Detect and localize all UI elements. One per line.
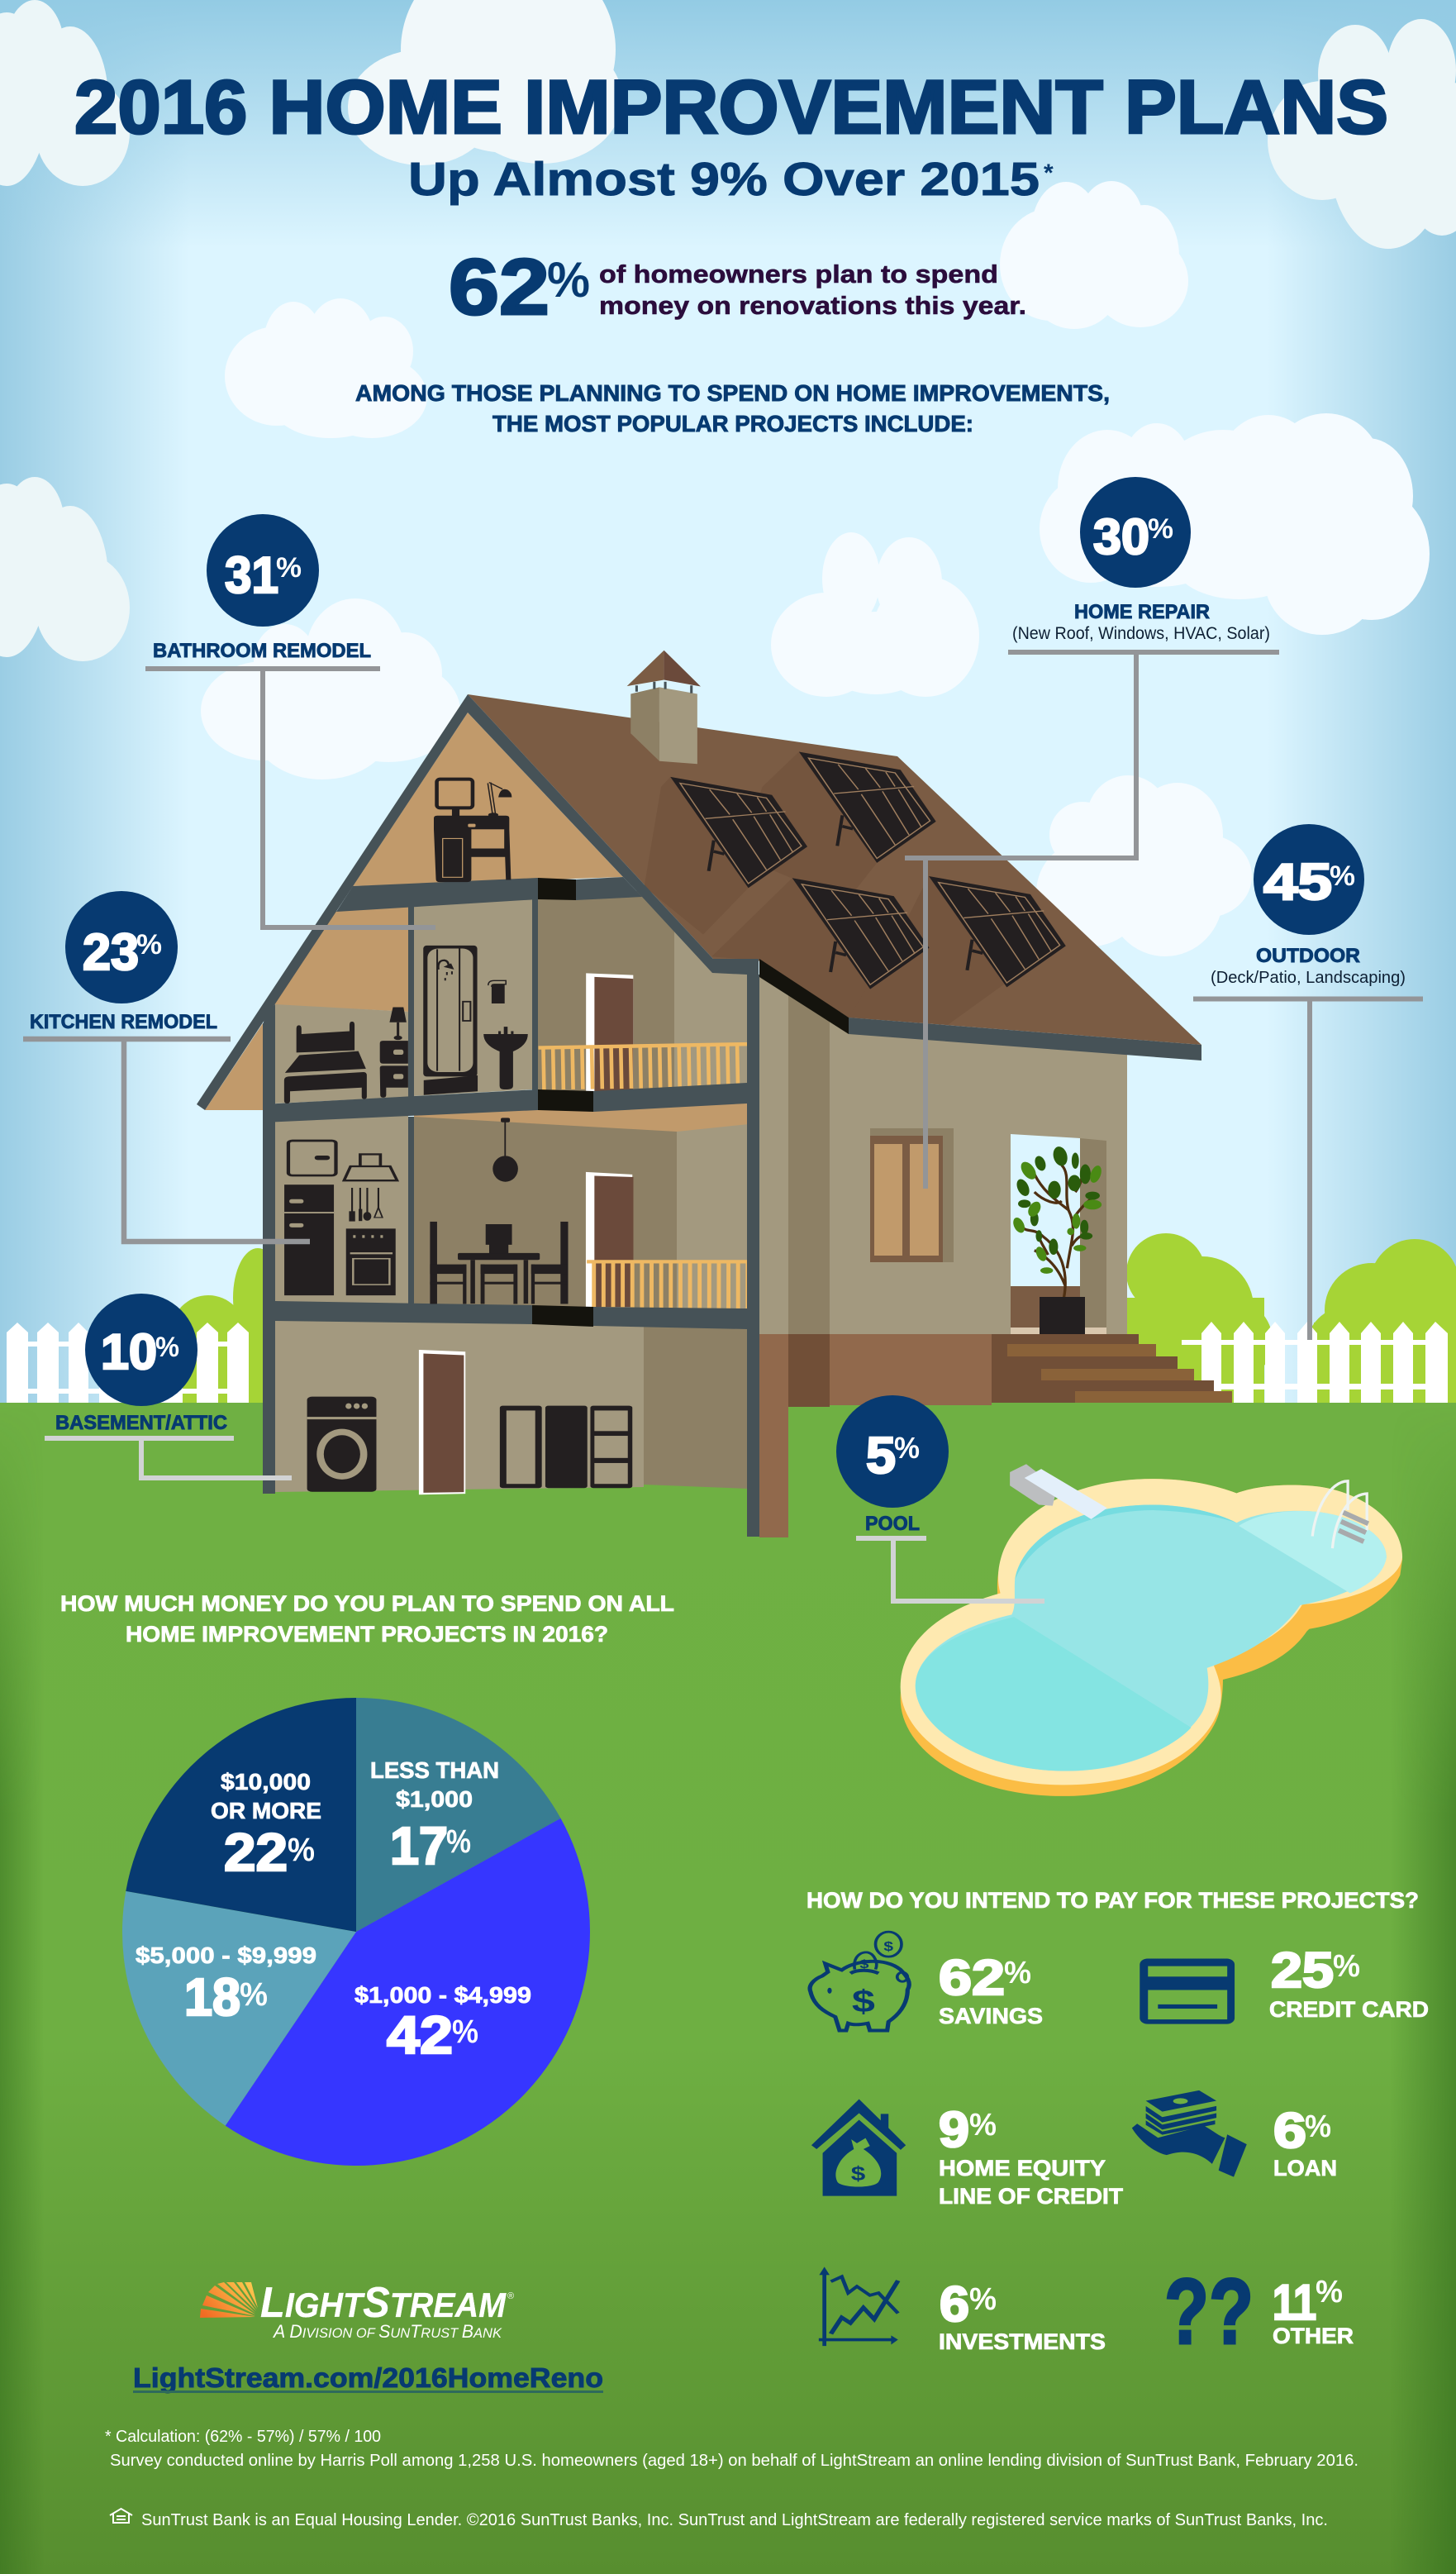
stat: other <box>1164 2260 1354 2363</box>
callout: outdoor 45 percent <box>1193 824 1423 1340</box>
callout: home repair 30 percent: HOME REPAIR <box>1074 601 1210 623</box>
upper door <box>586 973 633 1091</box>
slice: 10000 or more <box>126 1698 356 1932</box>
callout: bathroom remodel 31 percent: 31 <box>225 547 278 604</box>
upper balcony railing <box>539 1042 750 1068</box>
heading: spending question: HOW MUCH MONEY DO YOU PLAN TO SPEND ON ALL <box>60 1591 674 1616</box>
icon: piggy bank <box>810 1932 909 2031</box>
dining room walls <box>414 1095 749 1311</box>
slice: less than 1000: 17 <box>390 1816 448 1876</box>
structural frame <box>197 694 759 1537</box>
icon: dining table and chairs <box>430 1222 569 1304</box>
callout: pool 5 percent <box>836 1395 1044 1601</box>
logo: LightStream: A DIVISION OF SUNTRUST BANK <box>272 2321 502 2342</box>
roof <box>468 694 1201 1045</box>
stat: 62 percent of homeowners: % <box>547 252 590 307</box>
icon: shower <box>423 946 478 1095</box>
icon: bed and nightstand <box>284 1007 408 1103</box>
slice: 10000 or more: OR MORE <box>211 1798 321 1823</box>
right wing exterior wall <box>759 967 1127 1537</box>
balcony room walls <box>538 891 749 1091</box>
callout: basement attic 10 percent: % <box>155 1332 179 1363</box>
leader line <box>856 1538 1044 1601</box>
lower balcony railing <box>587 1260 749 1285</box>
stat: 62 percent of homeowners: 62 <box>449 243 550 331</box>
icon: hand holding money <box>1132 2090 1247 2177</box>
leader line <box>23 1039 310 1242</box>
badge <box>1254 824 1364 935</box>
section intro <box>355 380 1110 436</box>
badge <box>1080 477 1191 588</box>
callout: kitchen remodel 23 percent: % <box>136 929 162 960</box>
slice: 5000 to 9999: % <box>240 1976 268 2013</box>
stat: other: OTHER <box>1273 2324 1354 2348</box>
slice: less than 1000: LESS THAN <box>370 1757 499 1783</box>
subtitle: * <box>1044 160 1054 187</box>
icon: house with money bag: $ <box>851 2162 866 2185</box>
stat: credit card <box>1140 1942 1429 2024</box>
icon: sunburst <box>200 2282 258 2318</box>
slice: 1000 to 4999 <box>226 1818 590 2166</box>
basement door <box>419 1350 465 1494</box>
kitchen walls <box>275 1112 408 1306</box>
pie chart <box>122 1698 590 2166</box>
section intro: THE MOST POPULAR PROJECTS INCLUDE: <box>492 411 973 436</box>
slice: less than 1000: % <box>446 1823 471 1860</box>
front steps <box>992 1334 1232 1403</box>
icon: pendant lamp <box>492 1118 518 1182</box>
callout: home repair 30 percent: 30 <box>1093 509 1149 565</box>
callout: home repair 30 percent: % <box>1148 513 1173 545</box>
basement walls <box>275 1318 749 1492</box>
slice: 1000 to 4999: % <box>452 2014 478 2050</box>
footnotes: SunTrust Bank is an Equal Housing Lender. ©2016 SunTrust Banks, Inc. SunTrust and LightStream are federally registered service marks of SunTrust Banks, Inc. <box>141 2511 1328 2529</box>
slice: 5000 to 9999: 18 <box>184 1967 240 2027</box>
badge <box>65 891 178 1003</box>
slice: 1000 to 4999: 42 <box>387 2005 453 2065</box>
leader line <box>905 652 1279 1189</box>
callout: kitchen remodel 23 percent: KITCHEN REMODEL <box>30 1011 217 1033</box>
callout: basement attic 10 percent <box>45 1294 292 1478</box>
icon: equal housing <box>110 2509 132 2523</box>
icon: washing machine <box>307 1397 376 1492</box>
stat: savings <box>810 1932 1043 2031</box>
stat: home equity: HOME EQUITY <box>939 2156 1106 2181</box>
callout: basement attic 10 percent: 10 <box>101 1324 157 1380</box>
stat: savings: 62 <box>939 1950 1005 2005</box>
diving board <box>1010 1464 1107 1519</box>
house illustration <box>197 651 1232 1537</box>
callout: pool 5 percent: POOL <box>865 1513 920 1535</box>
logo: LightStream: ® <box>507 2291 514 2301</box>
picket fence left <box>7 1323 249 1403</box>
stat: investments: INVESTMENTS <box>939 2329 1106 2354</box>
stat: 62 percent of homeowners: money on renovations this year. <box>599 291 1026 320</box>
stat: investments: 6 <box>940 2276 969 2332</box>
heading: spending question <box>60 1591 674 1647</box>
footnotes: Survey conducted online by Harris Poll among 1,258 U.S. homeowners (aged 18+) on behalf of LightStream an online lending division of SunTrust Bank, February 2016. <box>110 2452 1358 2470</box>
slice: 5000 to 9999 <box>122 1891 356 2126</box>
stat: home equity: % <box>969 2108 997 2143</box>
leader line <box>1193 999 1423 1340</box>
leader line <box>145 669 435 927</box>
logo: LightStream <box>200 2279 514 2342</box>
slice: 10000 or more: % <box>288 1832 315 1868</box>
icon: question marks: ?? <box>1164 2260 1254 2363</box>
grass background <box>0 1403 1456 2574</box>
icon: piggy bank: $ <box>883 1939 894 1953</box>
slice: 1000 to 4999: $1,000 - $4,999 <box>354 1982 531 2008</box>
attic and eave tan fill <box>205 713 623 1110</box>
leader line <box>45 1438 292 1478</box>
house cross-section <box>197 694 759 1537</box>
pool <box>901 1464 1402 1796</box>
window <box>870 1128 954 1262</box>
stat: home equity: LINE OF CREDIT <box>939 2184 1124 2209</box>
callout: kitchen remodel 23 percent <box>23 891 310 1242</box>
badge <box>207 514 319 627</box>
heading: payment question: HOW DO YOU INTEND TO PAY FOR THESE PROJECTS? <box>807 1888 1419 1913</box>
stat: loan: LOAN <box>1273 2156 1337 2181</box>
stat: other: % <box>1316 2275 1343 2309</box>
callout: outdoor 45 percent: 45 <box>1263 854 1332 911</box>
stat: credit card: CREDIT CARD <box>1269 1997 1429 2022</box>
stat: home equity <box>811 2100 1124 2209</box>
bathroom walls <box>414 899 532 1096</box>
stat: savings: SAVINGS <box>939 2004 1043 2028</box>
callout: pool 5 percent: % <box>894 1431 920 1465</box>
logo: LightStream: LIGHTSTREAM <box>260 2279 507 2327</box>
stat: other: 11 <box>1273 2275 1316 2330</box>
pool deck <box>901 1479 1402 1796</box>
icon: piggy bank: $ <box>859 1957 869 1971</box>
stat: credit card: % <box>1333 1949 1360 1984</box>
icon: piggy bank: $ <box>852 1985 875 2019</box>
icon: house with money bag <box>811 2100 906 2196</box>
solar panels <box>670 752 1066 989</box>
callout: home repair 30 percent <box>905 477 1279 1189</box>
picket fence right <box>1182 1322 1448 1403</box>
badge <box>85 1294 197 1406</box>
callout: pool 5 percent: 5 <box>866 1428 896 1485</box>
stat: 62 percent of homeowners: of homeowners plan to spend <box>599 260 998 288</box>
icon: sink and towel <box>483 980 528 1089</box>
black floor joists <box>532 878 593 1327</box>
heading: spending question: HOME IMPROVEMENT PROJECTS IN 2016? <box>126 1622 608 1647</box>
patio opening with potted tree <box>1011 1134 1106 1334</box>
slice: 10000 or more: 22 <box>224 1823 288 1882</box>
stat: investments: % <box>969 2282 997 2317</box>
callout: outdoor 45 percent: OUTDOOR <box>1256 945 1360 967</box>
callout: outdoor 45 percent: (Deck/Patio, Landscaping) <box>1211 969 1406 987</box>
icon: line chart <box>819 2267 898 2346</box>
icon: kitchen appliances <box>284 1141 397 1295</box>
slice: 10000 or more: $10,000 <box>221 1769 311 1795</box>
section intro: AMONG THOSE PLANNING TO SPEND ON HOME IMPROVEMENTS, <box>355 380 1110 406</box>
callout: bathroom remodel 31 percent: % <box>276 552 302 584</box>
stat: loan <box>1132 2090 1337 2181</box>
bedroom walls <box>275 1004 408 1103</box>
callout: basement attic 10 percent: BASEMENT/ATTIC <box>55 1412 227 1434</box>
slice: 5000 to 9999: $5,000 - $9,999 <box>136 1942 316 1968</box>
subtitle: Up Almost 9% Over 2015 <box>408 153 1040 206</box>
icon: desk and computer <box>434 779 512 882</box>
footnotes <box>105 2428 1358 2529</box>
callout: kitchen remodel 23 percent: 23 <box>83 924 139 981</box>
icon: credit card <box>1140 1959 1235 2024</box>
pool ladder <box>1312 1481 1368 1548</box>
slice: less than 1000 <box>356 1698 560 1932</box>
icon: storage cabinets <box>500 1406 632 1488</box>
chimney <box>627 651 701 764</box>
badge <box>836 1395 949 1508</box>
callout: home repair 30 percent: (New Roof, Windows, HVAC, Solar) <box>1012 624 1270 643</box>
eave and fascia <box>759 959 1201 1061</box>
bushes <box>171 1233 1456 1407</box>
stat: 62 percent of homeowners <box>449 243 1026 331</box>
stat: credit card: 25 <box>1271 1942 1334 1998</box>
stat: loan: % <box>1305 2109 1331 2144</box>
stat: loan: 6 <box>1273 2103 1306 2158</box>
title: 2016 HOME IMPROVEMENT PLANS <box>74 65 1388 150</box>
stat: home equity: 9 <box>939 2102 969 2157</box>
sky background <box>0 0 1456 1422</box>
callout: outdoor 45 percent: % <box>1330 860 1355 892</box>
pool water <box>916 1505 1387 1771</box>
footnotes: * Calculation: (62% - 57%) / 57% / 100 <box>105 2428 381 2446</box>
callout: bathroom remodel 31 percent: BATHROOM REMODEL <box>153 640 371 662</box>
lower door <box>586 1172 633 1307</box>
stat: investments <box>819 2267 1106 2354</box>
callout: bathroom remodel 31 percent <box>145 514 435 927</box>
website link: LightStream.com/2016HomeReno <box>133 2362 603 2393</box>
slice: less than 1000: $1,000 <box>396 1786 473 1812</box>
stat: savings: % <box>1004 1956 1031 1990</box>
clouds <box>0 0 1456 956</box>
